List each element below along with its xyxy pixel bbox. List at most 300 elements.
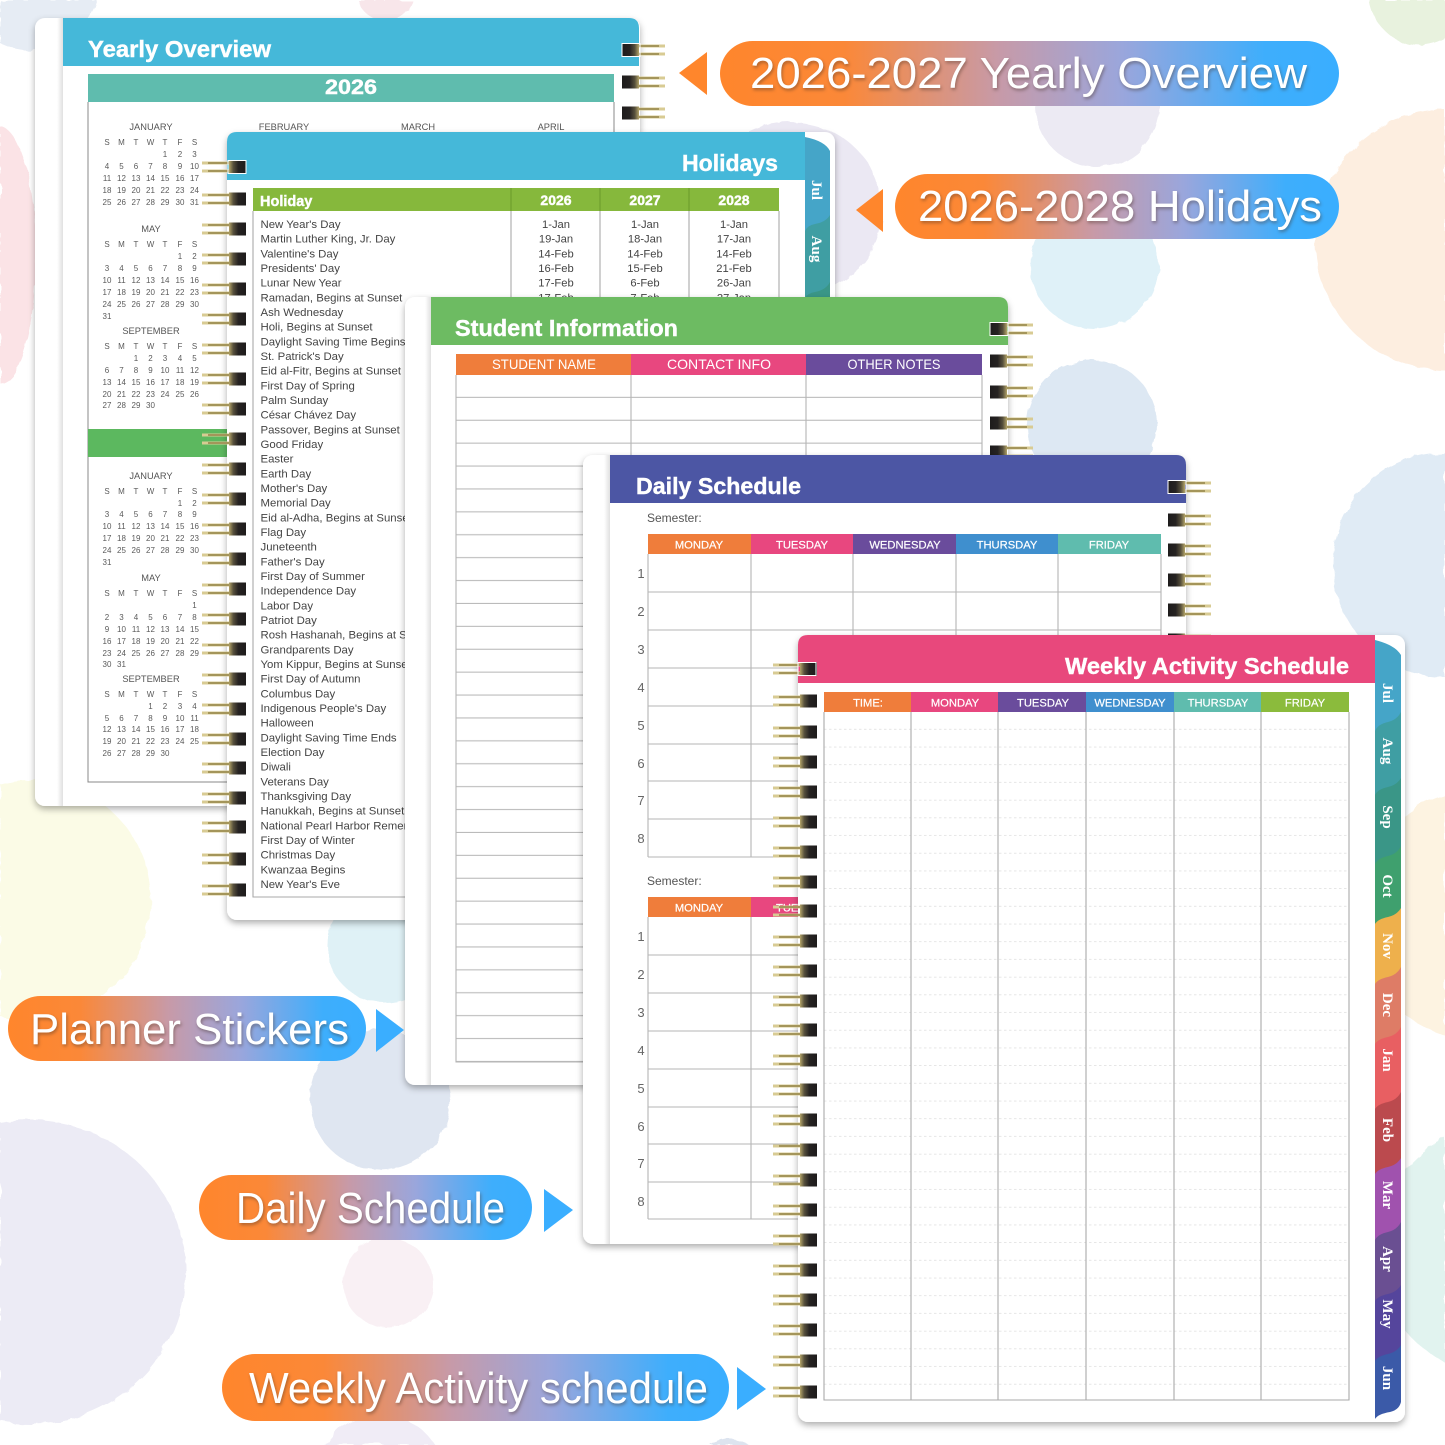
calendar: January 2027: 4 xyxy=(119,510,124,519)
holiday dates: 1-Jan xyxy=(631,219,659,231)
calendar: January 2026: S xyxy=(192,138,197,147)
spiral rings: student information xyxy=(990,322,1033,458)
calendar: September 2027: 8 xyxy=(148,714,153,723)
calendar: January 2026: 28 xyxy=(146,198,155,207)
calendar: May 2026: 24 xyxy=(103,300,112,309)
calendar: May 2027: 9 xyxy=(105,625,110,634)
calendar: January 2026: 6 xyxy=(134,162,139,171)
arrow: planner stickers xyxy=(376,1009,404,1052)
calendar: May 2026: 29 xyxy=(176,300,185,309)
calendar: September 2026: 28 xyxy=(117,401,126,410)
cover: student information xyxy=(405,297,1008,1085)
holiday names list: First Day of Summer xyxy=(260,571,365,583)
calendar: September 2027: 10 xyxy=(176,714,185,723)
calendar: May 2027: 25 xyxy=(132,649,141,658)
holiday dates: 16-Feb xyxy=(538,263,574,275)
calendar: May 2026: 12 xyxy=(132,276,141,285)
cover: weekly activity xyxy=(798,635,1405,1422)
holiday names list: César Chávez Day xyxy=(260,410,356,422)
calendar: January 2026: F xyxy=(178,138,183,147)
table header: weekdays: THURSDAY xyxy=(977,540,1038,552)
calendar: May 2026: 4 xyxy=(119,264,124,273)
calendar: January 2026: 22 xyxy=(161,186,170,195)
table grid: first semester xyxy=(648,554,1161,857)
holiday names list: Father's Day xyxy=(260,556,325,568)
holiday names list: Indigenous People's Day xyxy=(260,703,386,715)
calendar: September 2027: 28 xyxy=(132,749,141,758)
page: Student Information xyxy=(405,297,1033,1085)
calendar: May 2027: 26 xyxy=(146,649,155,658)
month tabs: Jul xyxy=(1379,683,1395,703)
calendar: September 2026: 3 xyxy=(163,354,168,363)
table header: time and weekdays: WEDNESDAY xyxy=(1094,698,1166,710)
calendar: September 2027: F xyxy=(178,690,183,699)
calendar: May 2027: 13 xyxy=(161,625,170,634)
calendar: September 2027: 26 xyxy=(103,749,112,758)
calendar: January 2026: 18 xyxy=(103,186,112,195)
table header: second semester xyxy=(648,897,853,917)
holiday names list: Eid al-Fitr, Begins at Sunset xyxy=(260,366,402,378)
calendar: January 2027: 1 xyxy=(178,499,183,508)
month labels: JANUARY xyxy=(129,122,173,132)
calendar: September 2027: 21 xyxy=(132,737,141,746)
calendar: May 2026: S xyxy=(104,240,110,249)
label: Semester (second): Semester: xyxy=(647,874,702,888)
calendar: January 2027: S xyxy=(104,487,110,496)
calendar: September 2027: S xyxy=(192,690,197,699)
table header: Holiday years: 2026 xyxy=(540,192,572,208)
row numbers: first semester: 5 xyxy=(637,718,645,733)
calendar: January 2026: 26 xyxy=(117,198,126,207)
calendar: January 2026: 8 xyxy=(163,162,168,171)
calendar: September 2027: 29 xyxy=(146,749,155,758)
calendar: January 2027: T xyxy=(163,487,168,496)
calendar: September 2026: 7 xyxy=(119,366,124,375)
arrow: weekly activity xyxy=(737,1367,766,1410)
calendar: September 2027: 18 xyxy=(190,725,199,734)
table header: student columns: OTHER NOTES xyxy=(848,356,940,372)
holiday names list: First Day of Winter xyxy=(260,835,355,847)
calendar: May 2027: 12 xyxy=(146,625,155,634)
holiday names list: Ramadan, Begins at Sunset xyxy=(260,292,403,304)
holiday names list: Holi, Begins at Sunset xyxy=(260,322,373,334)
calendar: May 2027: T xyxy=(134,589,139,598)
row numbers: first semester: 1 xyxy=(637,566,645,581)
calendar: January 2027: 5 xyxy=(134,510,139,519)
table header: student columns: STUDENT NAME xyxy=(492,356,596,372)
header: Student Information xyxy=(431,297,1008,345)
calendar: September 2026: 20 xyxy=(103,390,112,399)
calendar: January 2026: 5 xyxy=(119,162,124,171)
month tabs: Dec xyxy=(1379,993,1395,1017)
calendar: September 2026: 25 xyxy=(176,390,185,399)
table: student rows xyxy=(456,375,982,1062)
callout: Weekly Activity schedule: Weekly Activity schedule xyxy=(249,1364,708,1413)
month tabs: Sep xyxy=(1379,805,1395,829)
month tabs: May xyxy=(1379,1299,1395,1329)
holiday dates: 15-Feb xyxy=(627,263,663,275)
page: Holidays xyxy=(202,132,835,920)
calendar: January 2026 xyxy=(103,138,199,207)
holiday names list: St. Patrick's Day xyxy=(260,351,344,363)
calendar: September 2026: 11 xyxy=(176,366,185,375)
calendar: September 2026: 22 xyxy=(132,390,141,399)
calendar: May 2027: 2 xyxy=(105,613,110,622)
header: Holidays: Holidays xyxy=(682,150,778,176)
calendar: January 2026: 21 xyxy=(146,186,155,195)
table frame xyxy=(88,102,614,782)
header: Yearly Overview xyxy=(63,18,639,66)
calendar: January 2027: 24 xyxy=(103,546,112,555)
page: Yearly Overview xyxy=(35,18,665,806)
spine shadow: student xyxy=(425,297,431,1085)
calendar: May 2027: 4 xyxy=(134,613,139,622)
calendar: September 2027: M xyxy=(118,690,125,699)
calendar: September 2027: 20 xyxy=(117,737,126,746)
calendar: January 2026: 10 xyxy=(190,162,199,171)
calendar: May 2026: 6 xyxy=(148,264,153,273)
calendar: January 2026: 15 xyxy=(161,174,170,183)
calendar: January 2027: W xyxy=(147,487,155,496)
calendar: January 2027: 8 xyxy=(178,510,183,519)
holiday dates: 14-Feb xyxy=(538,248,574,260)
calendar: September 2026: 8 xyxy=(134,366,139,375)
calendar: May 2026: 31 xyxy=(103,312,112,321)
table: weekly grid xyxy=(824,712,1349,1400)
spine shadow: daily xyxy=(604,455,610,1244)
calendar: January 2026: 11 xyxy=(103,174,112,183)
holiday names list: Hanukkah, Begins at Sunset xyxy=(260,806,405,818)
calendar: January 2027: 29 xyxy=(176,546,185,555)
label: Semester (first): Semester: xyxy=(647,511,702,525)
holiday names list: Yom Kippur, Begins at Sunset xyxy=(260,659,412,671)
calendar: May 2026: 30 xyxy=(190,300,199,309)
tabs: Jul and Aug xyxy=(805,137,830,305)
calendar: September 2027: 24 xyxy=(176,737,185,746)
calendar: January 2027: 7 xyxy=(163,510,168,519)
calendar: January 2027: 20 xyxy=(146,534,155,543)
calendar: September 2026: 29 xyxy=(132,401,141,410)
month labels: APRIL xyxy=(538,122,564,132)
callout: 2026-2028 Holidays: 2026-2028 Holidays xyxy=(918,182,1322,231)
calendar: September 2027: 15 xyxy=(146,725,155,734)
calendar: September 2027: 11 xyxy=(190,714,199,723)
calendar: May 2026: T xyxy=(163,240,168,249)
holiday names list: Martin Luther King, Jr. Day xyxy=(260,234,396,246)
calendar: May 2026: 17 xyxy=(103,288,112,297)
holiday dates: 18-Jan xyxy=(628,234,662,246)
holiday names list: Diwali xyxy=(260,762,291,774)
header: Student Information: Student Information xyxy=(455,315,678,341)
calendar: September 2026: 19 xyxy=(190,378,199,387)
calendar: May 2027 xyxy=(103,589,199,669)
holiday names list: Mother's Day xyxy=(260,483,328,495)
calendar: September 2026: 10 xyxy=(161,366,170,375)
calendar: January 2027: 16 xyxy=(190,522,199,531)
calendar: September 2026: 18 xyxy=(176,378,185,387)
calendar: September 2026: 12 xyxy=(190,366,199,375)
table header: Holiday years: 2028 xyxy=(718,192,750,208)
calendar: May 2026: S xyxy=(192,240,197,249)
holiday names list: Eid al-Adha, Begins at Sunset xyxy=(260,512,413,524)
row numbers: second semester xyxy=(637,929,645,1209)
calendar: May 2026: 8 xyxy=(178,264,183,273)
calendar: May 2027: 3 xyxy=(119,613,124,622)
holiday dates: 27-Jan xyxy=(717,292,751,304)
calendar: September 2026: 30 xyxy=(146,401,155,410)
calendar: September 2027: T xyxy=(134,690,139,699)
month labels: MAY xyxy=(141,224,161,234)
calendar: January 2027: 9 xyxy=(192,510,197,519)
calendar: September 2027: 12 xyxy=(103,725,112,734)
holiday names list: Halloween xyxy=(260,718,314,730)
header: Weekly Activity Schedule xyxy=(798,635,1375,683)
calendar: January 2026: 23 xyxy=(176,186,185,195)
row numbers: first semester: 3 xyxy=(637,642,645,657)
calendar: September 2026: 24 xyxy=(161,390,170,399)
row numbers: second semester: 5 xyxy=(637,1081,645,1096)
arrow: to yearly overview xyxy=(679,52,707,95)
calendar: September 2026: 1 xyxy=(134,354,139,363)
calendar: September 2027: 5 xyxy=(105,714,110,723)
calendar: May 2026: 13 xyxy=(146,276,155,285)
calendar: January 2026: 4 xyxy=(105,162,110,171)
calendar: September 2027: 4 xyxy=(192,702,197,711)
holiday names list: Thanksgiving Day xyxy=(260,791,351,803)
table header: time and weekdays: FRIDAY xyxy=(1285,698,1326,710)
month tabs: Apr xyxy=(1379,1246,1395,1272)
month labels: MARCH xyxy=(401,122,435,132)
calendar: January 2026: 3 xyxy=(192,150,197,159)
holiday dates: 14-Feb xyxy=(627,248,663,260)
row numbers: second semester: 8 xyxy=(637,1194,645,1209)
calendar: May 2027: 19 xyxy=(146,637,155,646)
table header: Holiday years: 2027 xyxy=(629,192,661,208)
row numbers: first semester: 6 xyxy=(637,756,645,771)
calendar: September 2026: W xyxy=(147,342,155,351)
table header: Holiday years xyxy=(253,188,779,211)
row numbers: first semester xyxy=(637,566,645,846)
calendar: September 2026: 17 xyxy=(161,378,170,387)
table header: time and weekdays xyxy=(824,692,1349,712)
holiday dates: 17-Jan xyxy=(717,234,751,246)
calendar: January 2027: 2 xyxy=(192,499,197,508)
calendar: May 2027: 15 xyxy=(190,625,199,634)
calendar: May 2026: 3 xyxy=(105,264,110,273)
calendar: September 2026: F xyxy=(178,342,183,351)
calendar: May 2026: 21 xyxy=(161,288,170,297)
row numbers: first semester: 7 xyxy=(637,793,645,808)
calendar: January 2027: 25 xyxy=(117,546,126,555)
calendar: September 2026 xyxy=(103,342,199,410)
calendar: September 2026: 21 xyxy=(117,390,126,399)
callout: Weekly Activity schedule xyxy=(222,1354,729,1421)
calendar: January 2027: 12 xyxy=(132,522,141,531)
holiday names list: Valentine's Day xyxy=(260,248,339,260)
calendar: May 2026: 19 xyxy=(132,288,141,297)
calendar: January 2026: T xyxy=(163,138,168,147)
month tabs: Feb xyxy=(1379,1118,1395,1142)
calendar: January 2027: 31 xyxy=(103,558,112,567)
page: Daily Schedule xyxy=(583,455,1211,1244)
row numbers: second semester: 3 xyxy=(637,1005,645,1020)
calendar: May 2027: 11 xyxy=(132,625,141,634)
calendar: September 2026: 5 xyxy=(192,354,197,363)
holiday names list: Lunar New Year xyxy=(260,278,342,290)
band: 2027 xyxy=(88,429,233,457)
arrow: to holidays xyxy=(856,189,883,232)
calendar: January 2026: 13 xyxy=(132,174,141,183)
table grid: second semester xyxy=(648,917,800,1219)
holiday names list: New Year's Day xyxy=(260,219,341,231)
calendar: January 2026: S xyxy=(104,138,110,147)
holiday names list: Good Friday xyxy=(260,439,323,451)
calendar: September 2026: 13 xyxy=(103,378,112,387)
month labels: JANUARY xyxy=(129,471,173,481)
calendar: May 2026: 26 xyxy=(132,300,141,309)
callout: Planner Stickers: Planner Stickers xyxy=(30,1005,349,1054)
month labels: MAY xyxy=(141,573,161,583)
calendar: May 2027: T xyxy=(163,589,168,598)
calendar: September 2026: 16 xyxy=(146,378,155,387)
table header: weekdays: MONDAY xyxy=(675,540,724,552)
holiday dates: 1-Jan xyxy=(720,219,748,231)
calendar: May 2027: 7 xyxy=(178,613,183,622)
table header: time and weekdays: THURSDAY xyxy=(1188,698,1249,710)
holiday names list: National Pearl Harbor Remembrance xyxy=(260,820,448,832)
tabs: Jul and Aug: Jul xyxy=(808,180,824,200)
calendar: May 2026: 14 xyxy=(161,276,170,285)
calendar: May 2027: W xyxy=(147,589,155,598)
calendar: September 2027: 23 xyxy=(161,737,170,746)
holiday dates xyxy=(538,219,752,304)
header: Holidays xyxy=(227,132,805,180)
calendar: May 2026: 22 xyxy=(176,288,185,297)
calendar: September 2026: 2 xyxy=(148,354,153,363)
spiral rings: yearly overview xyxy=(622,44,665,120)
calendar: May 2026: 11 xyxy=(117,276,126,285)
holiday names list: First Day of Spring xyxy=(260,380,355,392)
calendar: September 2027: 7 xyxy=(134,714,139,723)
calendar: January 2026: 29 xyxy=(161,198,170,207)
month tabs: Jun xyxy=(1379,1366,1395,1391)
holiday names list: New Year's Eve xyxy=(260,879,340,891)
calendar: September 2027: 30 xyxy=(161,749,170,758)
calendar: January 2027: 11 xyxy=(117,522,126,531)
holiday dates: 26-Jan xyxy=(717,278,751,290)
calendar: January 2027: 21 xyxy=(161,534,170,543)
band: 2026 xyxy=(88,74,614,102)
calendar: January 2027: M xyxy=(118,487,125,496)
holiday names list: Grandparents Day xyxy=(260,644,354,656)
holiday dates: 19-Jan xyxy=(539,234,573,246)
holiday names list: Christmas Day xyxy=(260,850,335,862)
holiday dates: 1-Jan xyxy=(542,219,570,231)
header: Yearly Overview: Yearly Overview xyxy=(88,36,271,62)
month labels: SEPTEMBER xyxy=(122,326,180,336)
calendar: September 2026: M xyxy=(118,342,125,351)
holiday names list: Rosh Hashanah, Begins at Sunset xyxy=(260,630,435,642)
calendar: September 2027: 13 xyxy=(117,725,126,734)
calendar: January 2026: 16 xyxy=(176,174,185,183)
calendar: January 2027: 18 xyxy=(117,534,126,543)
calendar: May 2027: 29 xyxy=(190,649,199,658)
calendar: September 2026: S xyxy=(104,342,110,351)
calendar: September 2026: T xyxy=(134,342,139,351)
calendar: September 2026: 26 xyxy=(190,390,199,399)
calendar: January 2027: 22 xyxy=(176,534,185,543)
spiral rings: daily schedule xyxy=(1168,480,1211,646)
holiday names list: Independence Day xyxy=(260,586,356,598)
calendar: January 2027: 13 xyxy=(146,522,155,531)
holiday names list: First Day of Autumn xyxy=(260,674,361,686)
table header: Holiday years: Holiday xyxy=(260,194,312,210)
calendar: September 2026: T xyxy=(163,342,168,351)
calendar: January 2026: 25 xyxy=(103,198,112,207)
calendar: September 2027: 25 xyxy=(190,737,199,746)
calendar: January 2026: 24 xyxy=(190,186,199,195)
table header: student columns xyxy=(456,354,982,375)
calendar: January 2027: 10 xyxy=(103,522,112,531)
calendar: January 2026: M xyxy=(118,138,125,147)
calendar: January 2027: 3 xyxy=(105,510,110,519)
holiday names list: Memorial Day xyxy=(260,498,331,510)
calendar: September 2027: S xyxy=(104,690,110,699)
month tabs: Jan xyxy=(1379,1048,1395,1072)
holiday names list: Patriot Day xyxy=(260,615,317,627)
holiday dates: 17-Feb xyxy=(538,278,574,290)
calendar: January 2027: 26 xyxy=(132,546,141,555)
calendar: January 2026: 9 xyxy=(178,162,183,171)
table header: weekdays xyxy=(648,534,1161,554)
holiday names list: Labor Day xyxy=(260,600,313,612)
calendar: September 2026: 27 xyxy=(103,401,112,410)
calendar: January 2027 xyxy=(103,487,199,567)
calendar: January 2026: 1 xyxy=(163,150,168,159)
month tabs: Aug xyxy=(1379,738,1395,765)
holiday names list: Kwanzaa Begins xyxy=(260,864,346,876)
calendar: September 2027: 2 xyxy=(163,702,168,711)
cover: holidays xyxy=(227,132,835,920)
holiday names list: Earth Day xyxy=(260,468,311,480)
holiday names list: Columbus Day xyxy=(260,688,336,700)
calendar: September 2026: 9 xyxy=(148,366,153,375)
holiday dates: 14-Feb xyxy=(716,248,752,260)
spine shadow: yearly xyxy=(57,18,63,806)
calendar: January 2027: 17 xyxy=(103,534,112,543)
holiday names list xyxy=(260,219,448,891)
callout: Daily Schedule: Daily Schedule xyxy=(236,1184,505,1233)
holiday names list: Ash Wednesday xyxy=(260,307,344,319)
month labels: FEBRUARY xyxy=(259,122,309,132)
calendar: May 2027: 5 xyxy=(148,613,153,622)
calendar: January 2026: 17 xyxy=(190,174,199,183)
page: Weekly Activity Schedule xyxy=(773,635,1405,1422)
calendar: January 2027: T xyxy=(134,487,139,496)
holiday names list: Daylight Saving Time Ends xyxy=(260,732,397,744)
calendar: January 2027: 28 xyxy=(161,546,170,555)
calendar: May 2027: 21 xyxy=(176,637,185,646)
holiday names list: Easter xyxy=(260,454,294,466)
holiday names list: Election Day xyxy=(260,747,325,759)
row numbers: first semester: 8 xyxy=(637,831,645,846)
calendar: May 2027: 22 xyxy=(190,637,199,646)
holiday names list: Passover, Begins at Sunset xyxy=(260,424,401,436)
tabs: Jul and Aug: Aug xyxy=(808,236,824,263)
month labels: SEPTEMBER xyxy=(122,674,180,684)
row numbers: second semester: 6 xyxy=(637,1119,645,1134)
calendar: January 2026: T xyxy=(134,138,139,147)
